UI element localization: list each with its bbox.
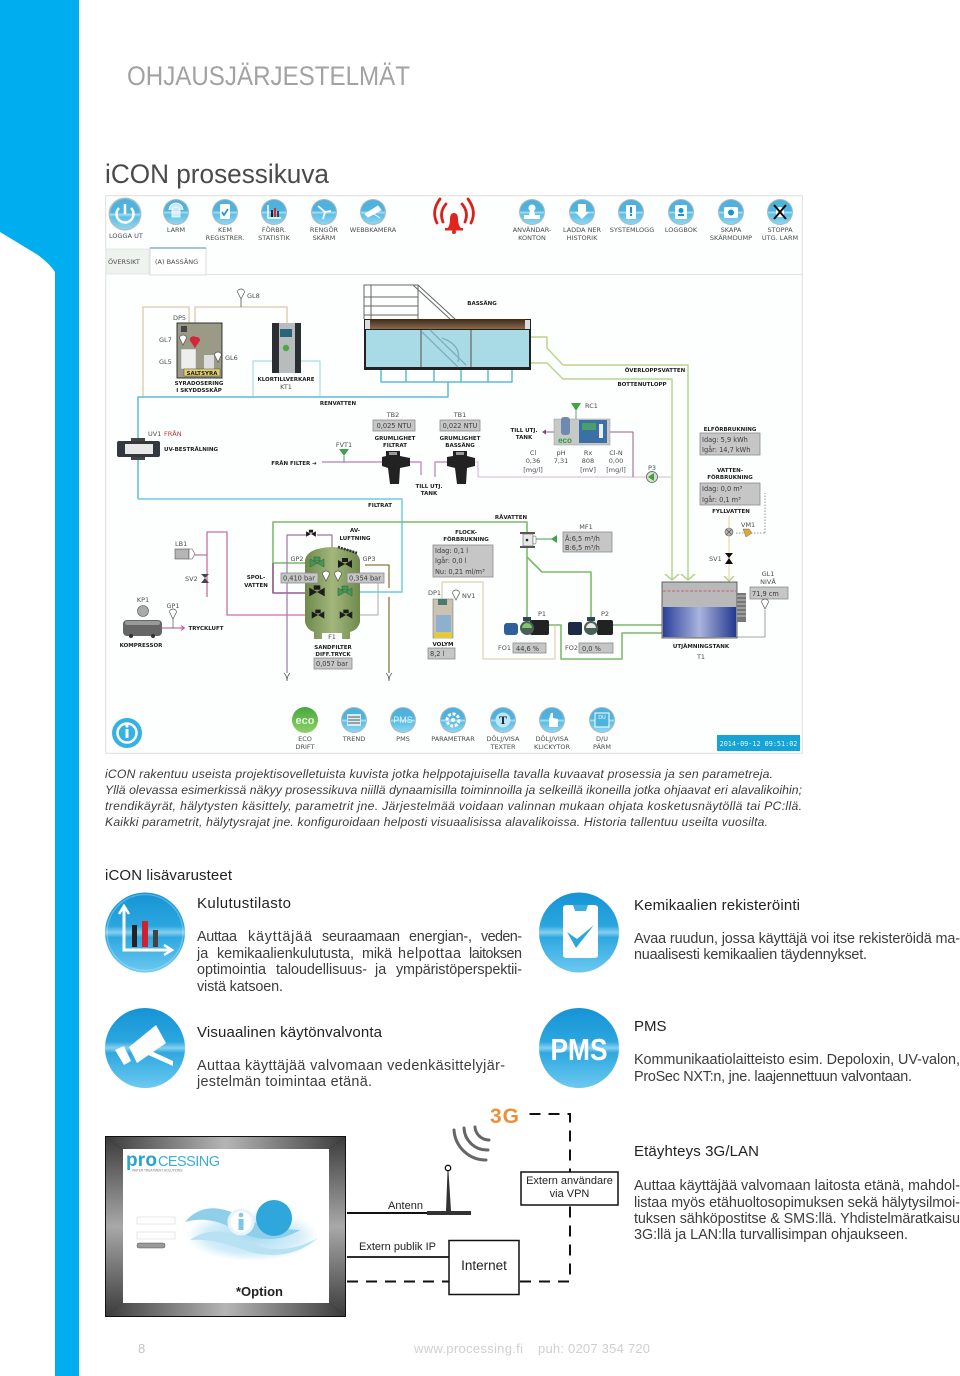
pipe labels (271, 367, 686, 521)
icon: d/u pärm (589, 707, 615, 733)
turbidity sensors: 0,022 NTU (443, 422, 478, 430)
compressor group (120, 540, 224, 649)
sand filter: 0,057 bar (316, 660, 348, 668)
pumps (498, 610, 613, 653)
pool with railing (364, 285, 531, 370)
bottom toolbar labels: PMS (396, 735, 410, 743)
pipe labels: ÖVERLOPPSVATTEN (625, 367, 686, 374)
turbidity sensors (336, 411, 481, 497)
public IP link: Extern publik IP (359, 1241, 436, 1253)
heading: Kulutustilasto (197, 895, 291, 912)
pumps: FO1 (498, 644, 511, 652)
eco analyser: [mg/l] (606, 466, 626, 474)
panel: etäyhteys (634, 1143, 960, 1243)
icon: eco: eco (296, 715, 315, 727)
eco analyser: [mg/l] (523, 466, 543, 474)
energy readouts: Idag: 5,9 kWh (702, 436, 748, 444)
heading: Kemikaalien rekisteröinti (634, 897, 800, 914)
equalisation tank: NIVÅ (760, 577, 776, 586)
body text (634, 931, 960, 963)
eco analyser: TILL UTJ. (510, 428, 538, 434)
body text: laitoksen (469, 946, 522, 962)
UV unit: UV-BESTRÅLNING (164, 446, 219, 453)
dosing unit (428, 589, 475, 659)
flocculation readout: FÖRBRUKNING (443, 536, 489, 543)
icon: canister (539, 892, 619, 972)
toolbar labels: LADDA NER (563, 226, 602, 234)
marker: GL8 (238, 289, 260, 300)
footer: puh: 0207 354 720 (538, 1341, 650, 1356)
syradosering cabinet: GL5 (159, 358, 172, 366)
icon: PMS: PMS (550, 1032, 608, 1067)
compressor group: SV2 (185, 575, 198, 583)
panel: kemikaalien rekisteröinti (539, 892, 960, 972)
pumps: P1 (538, 610, 546, 618)
icon: webbkamera (360, 199, 386, 225)
sand filter: AV- (350, 528, 360, 534)
pump P3: P3 (648, 464, 656, 472)
turbidity sensors: 0,025 NTU (377, 422, 412, 430)
body text: Auttaa käyttäjää valvomaan laitosta etänä, mahdol- (634, 1178, 960, 1194)
sand filter: F1 (328, 633, 336, 641)
VPN dashed route (347, 1114, 570, 1282)
pumps: P2 (601, 610, 609, 618)
compressor group: GP1 (166, 602, 180, 610)
syradosering cabinet: GL6 (225, 354, 238, 362)
panel: PMS (539, 1008, 960, 1088)
icon: rengör (311, 199, 337, 225)
body text: jestelmän toimintaa etänä. (196, 1074, 372, 1090)
panel: process screen (106, 196, 802, 754)
icon: stoppa larm (767, 199, 793, 225)
energy readouts: VATTEN- (717, 468, 743, 474)
body text: helpottaa (398, 946, 461, 962)
logo: pro (126, 1150, 157, 1171)
pump P3 (646, 464, 658, 482)
energy readouts: Idag: 0,0 m³ (702, 485, 743, 493)
bottom toolbar labels: PARAMETRAR (431, 735, 475, 743)
flow meter (520, 523, 612, 552)
eco analyser: eco (558, 436, 572, 445)
fill valve group: SV1 (709, 555, 722, 563)
toolbar labels: WEBBKAMERA (350, 226, 397, 234)
turbidity sensors: FILTRAT (383, 443, 407, 449)
klortillverkare: KLORTILLVERKARE (257, 377, 315, 383)
toolbar labels: RENGÖR (310, 225, 339, 234)
turbidity sensors: TB2 (386, 411, 399, 419)
body text: tuksen sähköpostitse & SMS:llä. Yhdistelmäratkaisu (634, 1211, 960, 1227)
icon: pms (390, 707, 416, 733)
panel: kulutustilasto (105, 892, 522, 995)
icon: larm (163, 199, 189, 225)
bottom toolbar icons (112, 707, 615, 751)
turbidity sensors: TILL UTJ. (415, 484, 443, 490)
body text: veden- (481, 929, 522, 945)
syradosering cabinet: SYRADOSERING (175, 381, 224, 387)
pipe labels: RÅVATTEN (495, 514, 527, 521)
body text: taloudellisuus- (276, 962, 367, 978)
timestamp (717, 735, 800, 751)
VPN user box: Extern användare (526, 1175, 613, 1187)
body text: Avaa ruudun, jossa käyttäjä voi itse rekisteröidä ma- (634, 931, 960, 947)
intro text block: trendikäyrät, hälytysten käsittely, parametrit jne. Järjestelmää voidaan valinnan mukaan ohjata kosketusnäytöllä tai PC:llä. (105, 799, 802, 813)
heading: Etäyhteys 3G/LAN (634, 1143, 759, 1160)
icon: skapa skärmdump (718, 199, 744, 225)
toolbar labels: KEM (218, 226, 232, 234)
footer: 8 (138, 1341, 145, 1356)
toolbar labels: FÖRBR. (262, 225, 286, 234)
icon: ladda ner (569, 199, 595, 225)
pipe labels: FILTRAT (368, 503, 392, 509)
klortillverkare: KT1 (280, 383, 292, 391)
syradosering cabinet: SALTSYRA (186, 371, 218, 377)
toolbar labels: SKAPA (721, 226, 742, 234)
syradosering cabinet: DP5 (173, 314, 186, 322)
toolbar labels: SKÄRM (313, 233, 335, 242)
fill valve group: VM1 (741, 521, 755, 529)
syradosering cabinet (159, 314, 238, 394)
eco analyser: 0,36 (526, 457, 540, 465)
bottom toolbar labels: PÄRM (593, 742, 611, 751)
tabs: (A) BASSÄNG (155, 257, 198, 266)
eco analyser (510, 402, 626, 474)
energy readouts: ELFÖRBRUKNING (704, 426, 757, 433)
dosing unit: NV1 (462, 592, 475, 600)
bottom toolbar labels: DÖLJ/VISA (536, 734, 569, 743)
body text: 3G:llä ja LAN:lla turvallisimpan ohjaukseen. (634, 1227, 908, 1243)
equalisation tank: UTJÄMNINGSTANK (673, 643, 730, 650)
toolbar labels: LARM (167, 226, 185, 234)
antenna link: Antenn (388, 1200, 423, 1212)
flocculation readout: Nu: 0,21 ml/m³ (435, 568, 485, 576)
heading: PMS (634, 1018, 667, 1035)
UV unit: UV1 (148, 430, 161, 438)
pumps: 0,0 % (582, 645, 601, 653)
eco analyser: pH (556, 449, 566, 457)
pipe labels: BOTTENUTLOPP (617, 382, 667, 388)
iCON splash (185, 1200, 318, 1261)
logo: CESSING (158, 1154, 220, 1170)
icon: iCON logo (112, 718, 142, 748)
compressor group: KP1 (137, 596, 149, 604)
eco analyser: 0,00 (609, 457, 623, 465)
footer (138, 1341, 650, 1356)
body text: Auttaa (197, 929, 237, 945)
body text (634, 1052, 960, 1085)
body text: käyttäjää (248, 929, 312, 945)
sand filter: SPOL- (247, 575, 265, 581)
body text: listaa myös etähuoltosopimuksen sekä hälytysilmoi- (634, 1195, 960, 1211)
tabs: ÖVERSIKT (108, 257, 140, 266)
panel: visuaalinen käytönvalvonta (105, 1008, 505, 1090)
icon: kem registrer (212, 199, 238, 225)
eco analyser: TANK (516, 435, 533, 441)
toolbar labels: SYSTEMLOGG (610, 226, 654, 234)
sand filter (244, 528, 392, 681)
intro text block: Yllä olevassa esimerkissä näkyy prosessikuva niillä dynaamisilla toiminnoilla ja selkeillä ikoneilla jotka ohjaavat eri alavalikoihin; (105, 783, 802, 797)
icon: camera (105, 1008, 185, 1088)
dosing unit: 8,2 l (430, 650, 445, 658)
pipe labels: RENVATTEN (320, 401, 357, 407)
pool label: BASSÄNG (467, 300, 497, 307)
body text: ympäristöperspektii- (396, 962, 522, 978)
icon: loggbok (668, 199, 694, 225)
bottom toolbar labels: TREND (342, 735, 365, 743)
syradosering cabinet: GL7 (159, 336, 172, 344)
eco analyser: 808 (582, 457, 594, 465)
VPN user box (521, 1172, 618, 1205)
icon: alarm bell (435, 199, 473, 234)
signal waves (454, 1127, 489, 1160)
pipe labels: FRÅN FILTER ➔ (271, 460, 317, 467)
body text: ProSec NXT:n, jne. laajennettuun valvontaan. (634, 1069, 912, 1085)
bottom toolbar labels: TEXTER (489, 743, 516, 751)
equalisation tank: GL1 (762, 570, 774, 578)
sand filter: GP2 (290, 555, 304, 563)
pumps: 44,6 % (516, 645, 539, 653)
accessories heading: iCON lisävarusteet (105, 867, 233, 884)
eco analyser: Cl (530, 449, 536, 457)
body text: nuaalisesti kemikaalien täydennykset. (634, 947, 867, 963)
logo (126, 1150, 220, 1172)
icon: d/u pärm: DU (598, 715, 606, 721)
internet box (449, 1240, 519, 1294)
blue side band (0, 0, 79, 1376)
toolbar labels: ANVÄNDAR- (513, 225, 552, 234)
sand filter: LUFTNING (339, 536, 371, 542)
icon: parametrar (440, 707, 466, 733)
fill valve group (709, 521, 755, 564)
body text: ja (196, 946, 208, 962)
energy readouts: FYLLVATTEN (712, 509, 750, 515)
toolbar labels: LOGGBOK (665, 226, 698, 234)
bottom toolbar labels: ECO (298, 735, 312, 743)
icon: logga ut (108, 198, 142, 230)
intro text block (105, 767, 802, 829)
internet box: Internet (461, 1258, 507, 1273)
toolbar labels: STATISTIK (258, 234, 291, 242)
timestamp: 2014-09-12 09:51:02 (720, 740, 797, 748)
turbidity sensors: BASSÄNG (445, 442, 475, 449)
tabs (106, 248, 802, 275)
toolbar labels (109, 225, 798, 242)
body text (196, 1058, 505, 1090)
icon: dölj texter: T (499, 713, 507, 727)
body text: Kommunikaatiolaitteisto esim. Depoloxin, UV-valon, (634, 1052, 960, 1068)
body text: energian-, (409, 929, 472, 945)
eco analyser: 7,31 (554, 457, 568, 465)
3G label: 3G (490, 1105, 519, 1128)
icon: statistik (261, 199, 287, 225)
flocculation readout (433, 530, 493, 577)
dosing unit: DP1 (428, 589, 441, 597)
energy readouts: Igår: 14,7 kWh (702, 445, 750, 454)
eco analyser: RC1 (585, 402, 598, 410)
energy readouts: Igår: 0,1 m³ (702, 495, 741, 504)
monitor (105, 1136, 346, 1317)
marker: GL8: GL8 (247, 292, 260, 300)
body text: seuraamaan (322, 929, 400, 945)
login form (137, 1217, 175, 1248)
compressor group: LB1 (175, 540, 187, 548)
body text: mikä (362, 946, 392, 962)
toolbar labels: LOGGA UT (109, 232, 143, 240)
top toolbar icons (108, 198, 798, 242)
icon: chart (105, 892, 185, 972)
compressor group: TRYCKLUFT (188, 626, 224, 632)
pumps: FO2 (565, 644, 578, 652)
heading: Visuaalinen käytönvalvonta (197, 1024, 383, 1041)
flocculation readout: Igår: 0,0 l (435, 556, 467, 565)
toolbar labels: STOPPA (767, 226, 793, 234)
antenna link (347, 1165, 471, 1215)
flocculation readout: Idag: 0,1 l (435, 547, 468, 555)
icon: dölj texter (490, 707, 516, 733)
flow meter: B:6,5 m³/h (565, 544, 600, 552)
eco analyser: Cl-N (609, 449, 623, 457)
toolbar labels: HISTORIK (567, 234, 598, 242)
icon: dölj klickytor (539, 707, 565, 733)
syradosering cabinet: I SKYDDSSKÅP (176, 387, 222, 394)
toolbar labels: REGISTRER. (206, 234, 244, 242)
turbidity sensors: FVT1 (336, 441, 352, 449)
UV unit (117, 429, 219, 460)
energy readouts (700, 426, 760, 515)
sand filter: 0,410 bar (283, 574, 315, 582)
sand filter: VATTEN (244, 583, 268, 589)
section heading: OHJAUSJÄRJESTELMÄT (127, 61, 410, 91)
VPN user box: via VPN (550, 1188, 589, 1200)
title: iCON prosessikuva (105, 159, 330, 189)
eco analyser: Rx (584, 449, 592, 457)
compressor group: KOMPRESSOR (120, 643, 163, 649)
icon: användarkonton (519, 199, 545, 225)
pipes (138, 299, 765, 673)
sand filter: GP3 (362, 555, 376, 563)
network diagram (105, 1105, 618, 1317)
body text: Auttaa käyttäjää valvomaan vedenkäsittelyjär- (197, 1058, 505, 1074)
eco analyser: [mV] (580, 466, 596, 474)
icon: pms: PMS (393, 715, 413, 725)
body text: vistä katsoen. (197, 979, 283, 995)
intro text block: iCON rakentuu useista projektisovelletuista kuvista jotka helppotajuisella tavalla kuvaavat prosessia ja sen parametreja. (105, 767, 773, 781)
toolbar labels: KONTON (518, 234, 546, 242)
body text (196, 929, 522, 995)
flocculation readout: FLOCK- (455, 530, 477, 536)
klortillverkare (257, 323, 315, 391)
turbidity sensors: TB1 (453, 411, 466, 419)
bottom toolbar labels: DRIFT (295, 743, 315, 751)
toolbar labels: SKÄRMDUMP (710, 233, 752, 242)
body text (634, 1178, 960, 1243)
energy readouts: FÖRBRUKNING (707, 474, 753, 481)
flow meter: Å:6,5 m³/h (565, 534, 600, 543)
turbidity sensors: GRUMLIGHET (375, 436, 416, 442)
icon: eco (292, 707, 318, 733)
sand filter: DIFF.TRYCK (315, 652, 351, 658)
equalisation tank: 71,9 cm (752, 590, 779, 598)
sand filter: 0,354 bar (349, 574, 381, 582)
equalisation tank: T1 (696, 653, 705, 661)
turbidity sensors: TANK (421, 491, 438, 497)
icon: trend (341, 707, 367, 733)
equalisation tank (662, 570, 788, 661)
turbidity sensors: GRUMLIGHET (440, 436, 481, 442)
body text: kemikaalienkulutusta, (217, 946, 354, 962)
bottom toolbar labels: KLICKYTOR (534, 743, 570, 751)
UV unit: FRÅN (164, 429, 182, 438)
dosing unit: VOLYM (433, 642, 453, 648)
body text: ja (374, 962, 386, 978)
flow meter: MF1 (579, 523, 593, 531)
intro text block: Kaikki parametrit, hälytysrajat jne. konfiguroidaan helposti visuaalisissa alavalikoissa. Historia tallentuu useilta vuosilta. (105, 815, 768, 829)
option note: *Option (236, 1284, 283, 1299)
bottom toolbar labels: DÖLJ/VISA (487, 734, 520, 743)
bottom toolbar labels (295, 734, 611, 751)
footer: www.processing.fi (413, 1341, 523, 1356)
icon: PMS (539, 1008, 619, 1088)
bottom toolbar labels: D/U (596, 735, 608, 743)
toolbar labels: UTG. LARM (762, 234, 798, 242)
body text: optimointia (197, 962, 266, 978)
icon: systemlogg (618, 199, 644, 225)
logo: WATER TREATMENT SOLUTIONS (132, 1168, 182, 1172)
public IP link (347, 1241, 449, 1257)
sand filter: SANDFILTER (314, 645, 353, 651)
